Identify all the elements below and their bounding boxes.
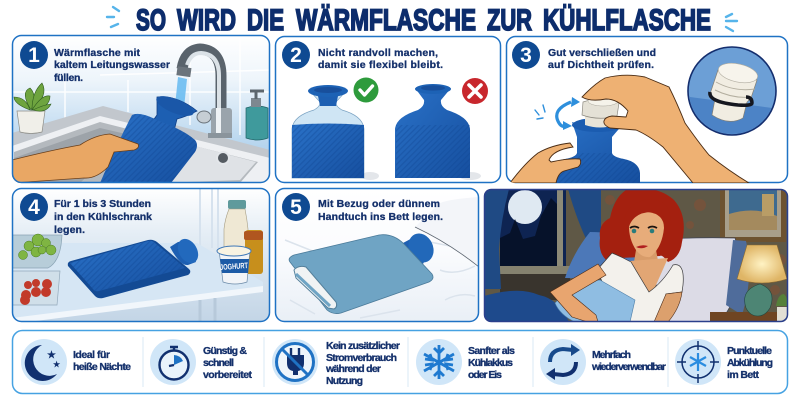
- icon: targeted snowflake: [675, 339, 721, 385]
- text: step 4: in den Kühlschrank: [54, 211, 152, 223]
- text: step 2: Nicht randvoll machen,: [318, 47, 438, 59]
- illustration: bedside lamp: [710, 245, 789, 324]
- text: step 1: [54, 47, 170, 84]
- text: no extra power: Kein zusätzlicher: [326, 340, 400, 352]
- panel: benefits bar: [12, 330, 788, 394]
- icon: sink drain: [217, 152, 229, 164]
- title: KÜHLFLASCHE: [543, 4, 711, 37]
- text: reusable: wiederverwendbar: [591, 361, 666, 373]
- icon: red cross: [462, 78, 488, 104]
- text: step 3: Gut verschließen und: [548, 47, 656, 59]
- illustration: right hand turning cap: [582, 75, 749, 183]
- number badge 5: 5: [290, 196, 302, 219]
- text: step 1: füllen.: [54, 72, 83, 84]
- illustration: plant in pot: [14, 83, 51, 134]
- text: targeted cooling in bed: im Bett: [727, 369, 760, 381]
- title: WÄRMFLASCHE: [296, 4, 476, 37]
- illustration: hot water bottle being filled: [100, 92, 197, 183]
- text: ideal for hot nights: Ideal für: [73, 349, 110, 361]
- panel: step 1 fill the bottle: [12, 35, 270, 183]
- text: step 2: damit sie flexibel bleibt.: [318, 59, 443, 71]
- text: ideal for hot nights: heiße Nächte: [73, 361, 131, 373]
- illustration: blue blanket: [484, 291, 569, 322]
- illustration: bottle cap peeking out: [403, 234, 434, 264]
- illustration: chrome faucet: [176, 49, 232, 138]
- text: step 1: Wärmflasche mit: [54, 47, 140, 59]
- callout: magnified stopper: [688, 47, 780, 139]
- text: cheap and fast: [203, 345, 252, 381]
- number badge 3: [512, 41, 540, 69]
- illustration: soap dispenser: [246, 90, 268, 140]
- illustration: tomato container: [12, 271, 60, 305]
- panel: step 3 seal the cap: [506, 36, 788, 183]
- illustration: water stream: [176, 77, 187, 102]
- title: DIE: [247, 4, 284, 37]
- icon: right title sparkle: [726, 14, 737, 31]
- text: ideal for hot nights: [73, 349, 131, 373]
- number badge 2: [282, 41, 310, 69]
- text: reusable: Mehrfach: [592, 349, 631, 361]
- text: step 4: Für 1 bis 3 Stunden: [54, 198, 151, 210]
- illustration: woman resting in bed: [550, 188, 684, 322]
- number badge 4: 4: [28, 196, 40, 219]
- icon: stopwatch: [150, 339, 196, 385]
- text: targeted cooling in bed: Abkühlung: [727, 357, 773, 369]
- illustration: curtains: [484, 189, 601, 289]
- text: cheap and fast: Günstig &: [203, 345, 247, 357]
- text: gentler than cooling packs: oder Eis: [468, 369, 502, 381]
- text: step 1: kaltem Leitungswasser: [54, 59, 170, 71]
- panel: step 5 in the bed: [275, 188, 479, 322]
- number badge 1: 1: [28, 44, 40, 67]
- icon: rotate arrows: [535, 97, 580, 130]
- text: step 5: [318, 198, 443, 223]
- text: step 3: auf Dichtheit prüfen.: [548, 59, 654, 71]
- panel: night bedroom illustration: [484, 188, 789, 324]
- text: gentler than cooling packs: Sanfter als: [468, 345, 515, 357]
- text: cheap and fast: vorbereitet: [203, 369, 252, 381]
- title: [136, 4, 711, 37]
- illustration: cap being screwed: [582, 96, 619, 128]
- illustration: left hand holding bottle: [510, 143, 581, 183]
- illustration: towel-wrapped bottle: [289, 235, 433, 314]
- text: step 5: Mit Bezug oder dünnem: [318, 198, 440, 210]
- text: no extra power: während der: [325, 363, 381, 375]
- illustration: honey jar: [244, 230, 263, 274]
- number badge 1: [20, 41, 48, 69]
- title: SO: [136, 4, 166, 37]
- illustration: bottle with neck: [548, 118, 640, 183]
- icon: left title sparkle: [107, 7, 119, 27]
- text: targeted cooling in bed: [727, 345, 773, 381]
- illustration: yoghurt tub: [217, 246, 251, 284]
- text: no extra power: [325, 340, 400, 387]
- illustration: overfilled bottle: [395, 84, 481, 180]
- number badge 3: 3: [520, 44, 532, 67]
- number badge 5: [282, 193, 310, 221]
- illustration: framed painting: [720, 189, 786, 242]
- panel: step 4 in the fridge: [12, 188, 270, 324]
- text: step 3: [548, 47, 656, 71]
- text: step 4: legen.: [54, 224, 85, 236]
- illustration: yoghurt tub: JOGHURT: [220, 261, 248, 272]
- illustration: bed pillows: [565, 232, 749, 322]
- illustration: night window with moon: [500, 189, 570, 300]
- panel: step 2 not too full: [276, 36, 500, 182]
- text: gentler than cooling packs: [468, 345, 515, 381]
- number badge 2: 2: [290, 44, 302, 67]
- text: step 4: [54, 198, 152, 236]
- text: gentler than cooling packs: Kühlakkus: [468, 357, 513, 369]
- icon: moon and stars: [21, 339, 67, 385]
- title: ZUR: [487, 4, 532, 37]
- illustration: hand holding bottle: [12, 134, 138, 183]
- icon: green check: [354, 78, 378, 102]
- title: WIRD: [177, 4, 236, 37]
- text: no extra power: Stromverbrauch: [326, 352, 397, 364]
- text: cheap and fast: schnell: [203, 357, 234, 369]
- icon: snowflake: [416, 339, 462, 385]
- text: step 2: [318, 47, 443, 71]
- icon: reuse arrows: [540, 339, 586, 385]
- illustration: blue hot water bottle on shelf: [68, 235, 202, 298]
- text: targeted cooling in bed: Punktuelle: [727, 345, 772, 357]
- icon: moon and stars: ★: [53, 360, 61, 369]
- illustration: milk bottle: [224, 200, 248, 247]
- icon: moon and stars: ★: [47, 350, 56, 361]
- icon: no power plug: [272, 339, 318, 385]
- number badge 4: [20, 193, 48, 221]
- text: step 5: Handtuch ins Bett legen.: [318, 211, 443, 223]
- text: no extra power: Nutzung: [326, 375, 363, 387]
- text: reusable: [591, 349, 666, 373]
- illustration: bowl of grapes: [12, 234, 62, 268]
- illustration: pillow: [415, 197, 479, 267]
- illustration: correctly filled bottle: [292, 85, 379, 180]
